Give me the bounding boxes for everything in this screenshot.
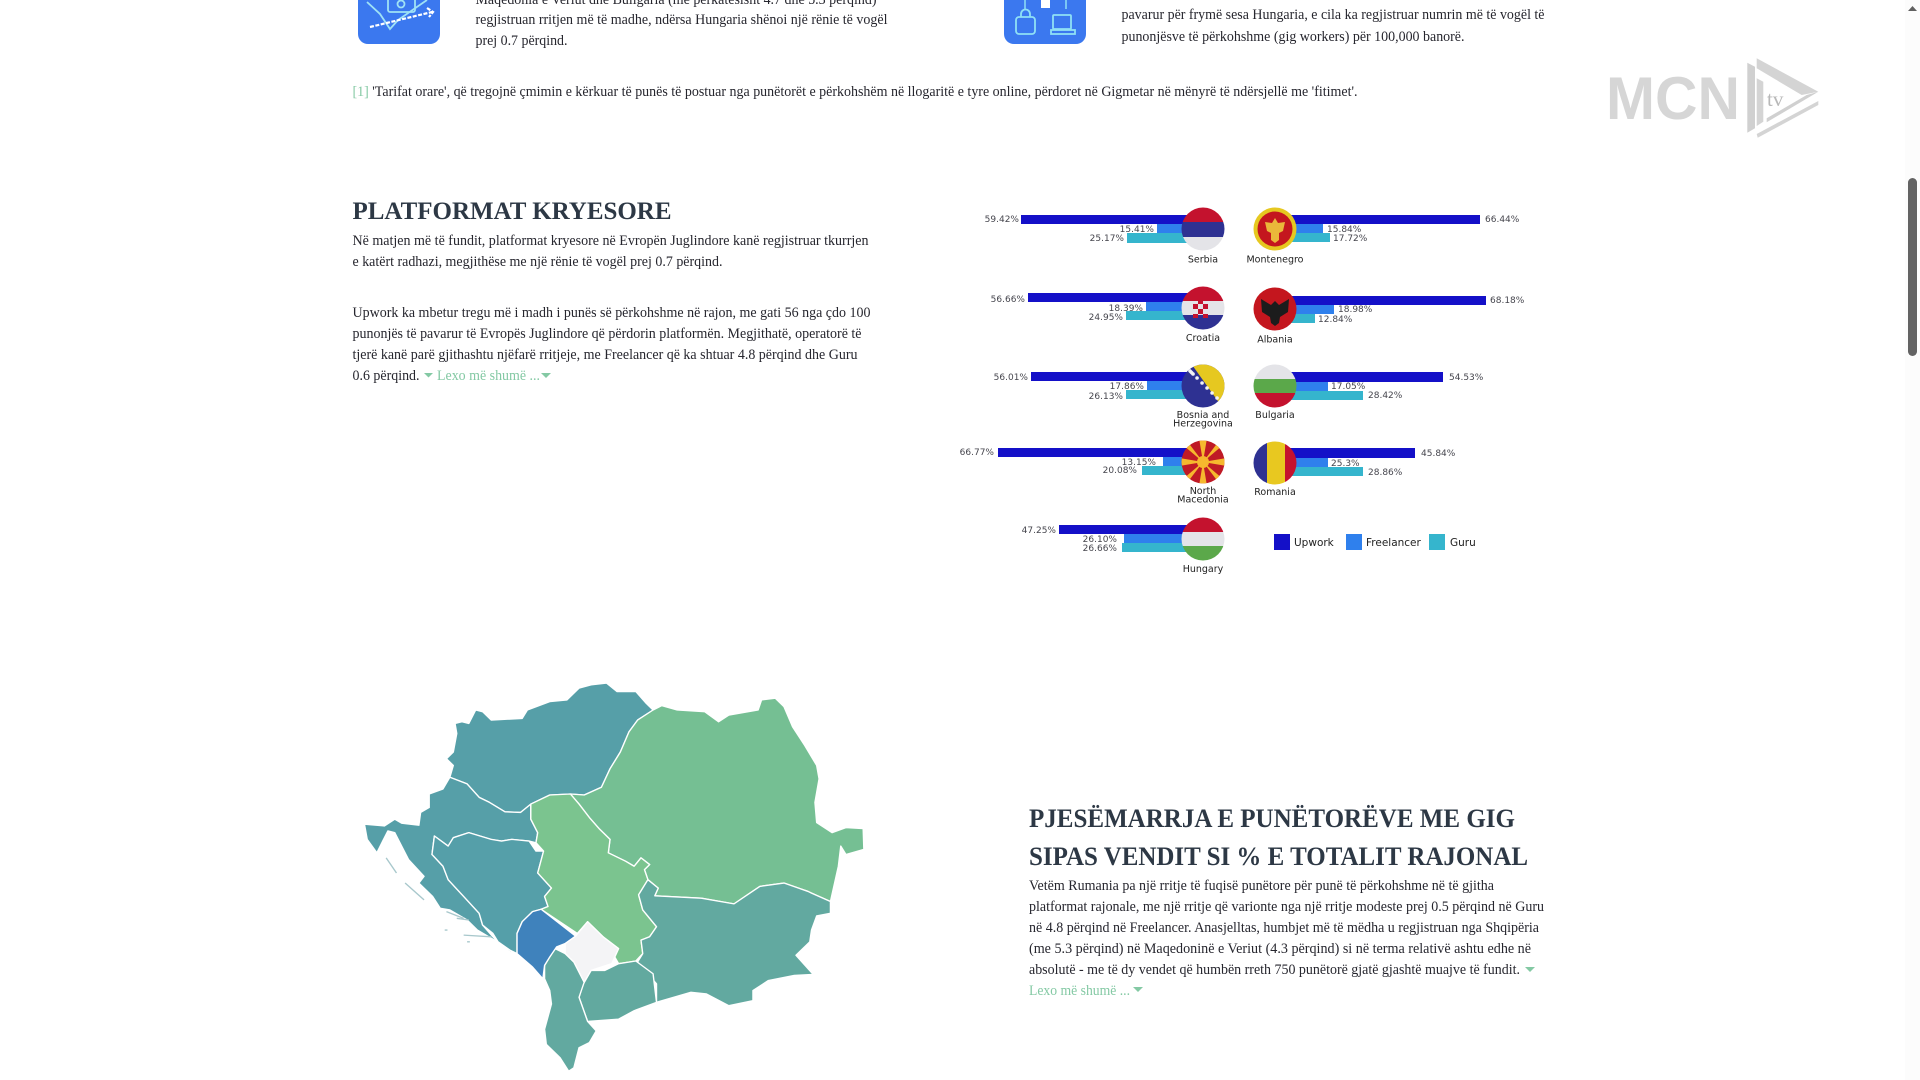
heading: platformat kryesore: PLATFORMAT KRYESORE [352, 198, 672, 225]
row: Hungary [1022, 515, 1230, 575]
text block: participation paragraph: në 4.8 përqind në Freelancer. Anasjelltas, humbjet më të mëdha u regjistruan nga Shqipëria [1029, 920, 1540, 936]
row: Romania: 25.3% [1331, 459, 1360, 469]
row: Croatia [991, 286, 1224, 341]
row: Croatia: 56.66% [991, 295, 1025, 305]
legend: Guru [1450, 537, 1476, 549]
row: Albania: 68.18% [1490, 296, 1525, 306]
row: Croatia: 24.95% [1089, 313, 1123, 323]
heading: participation by country [1029, 804, 1528, 871]
heading: participation by country: PJESËMARRJA E PUNËTORËVE ME GIG [1029, 804, 1515, 833]
text block: upwork paragraph: 0.6 përqind. [352, 368, 420, 384]
row: Romania: 28.86% [1368, 468, 1403, 478]
map region: Kosovo [565, 922, 619, 982]
text block: participation paragraph: absolutë - me të dy vendet që humbën rreth 750 punëtorë gjatë gjashtë muajve të fundit. [1029, 962, 1520, 978]
row: Montenegro: 15.84% [1327, 225, 1362, 235]
text block: participation paragraph: (me 5.3 përqind) në Maqedoninë e Veriut (4.3 përqind) si në terma relativë ashtu edhe në [1029, 941, 1531, 957]
scrollbar [1905, 0, 1920, 1080]
row: Serbia: 59.42% [985, 215, 1019, 225]
text block: upwork paragraph: Upwork ka mbetur tregu më i madh i punës së përkohshme në rajon, me gati 56 nga çdo 100 [352, 305, 870, 321]
legend [1274, 534, 1476, 550]
map region: Albania [545, 949, 596, 1071]
map: gig worker share by country [364, 683, 864, 1071]
icon: map with trend arrow [358, 0, 440, 44]
row: Bosnia and Herzegovina: 17.86% [1110, 382, 1144, 392]
row: Bulgaria: Bulgaria [1255, 410, 1295, 421]
watermark logo: MCN tv: tv [1767, 87, 1784, 111]
row: Hungary: 26.66% [1083, 544, 1117, 554]
text block: upwork paragraph: punonjës të pavarur të Evropës Juglindore që përdorin platformën. Megjithatë, operatorë të [352, 326, 862, 342]
legend: Freelancer [1366, 537, 1422, 549]
row: Bosnia and Herzegovina: 56.01% [994, 373, 1028, 383]
text block: platforms intro [352, 233, 869, 270]
text block: participation paragraph: Lexo më shumë ... [1029, 983, 1130, 999]
row: Montenegro [1246, 208, 1520, 266]
text block: top right summary: pavarur për frymë sesa Hungaria, e cila ka regjistruar numrin më të vogël të [1122, 7, 1544, 23]
text block: upwork paragraph: Lexo më shumë ... [437, 368, 540, 384]
text block: platforms intro: e katërt radhazi, megjithëse me një rënie të vogël prej 0.7 përqind. [352, 254, 722, 270]
row: Serbia: 15.41% [1120, 225, 1154, 235]
icon: bag and laptop [1004, 0, 1086, 44]
row: Montenegro: 17.72% [1333, 234, 1368, 244]
text block: participation paragraph: Vetëm Rumania pa një rritje të fuqisë punëtore për punë të përkohshme në të gjitha [1029, 878, 1495, 894]
footnote: [1] 'Tarifat orare', që tregojnë çmimin e kërkuar të punës të postuar nga punëtorët e përkohshëm në llogaritë e tyre online, përdoret në Gigmetar në mënyrë të ndërsjellë me 'fitimet'. [352, 84, 1358, 100]
map region: Hungary [446, 683, 653, 812]
row: Montenegro: Montenegro [1246, 254, 1304, 266]
row: Romania: 45.84% [1421, 449, 1456, 459]
row: North Macedonia: North [1190, 486, 1216, 497]
row: Hungary: 26.10% [1083, 535, 1117, 545]
watermark logo: MCN tv: MCN [1606, 65, 1740, 132]
text block: top left summary: regjistruan rritjen më të madhe, ndërsa Hungaria shënoi një rënie të vogël [476, 12, 888, 28]
text block: top right summary [1122, 7, 1544, 45]
row: Bulgaria [1250, 362, 1484, 421]
chart: platform shares by country [960, 205, 1525, 575]
row: Albania: Albania [1257, 334, 1293, 346]
map region: Montenegro [517, 909, 576, 979]
row: Albania [1254, 288, 1525, 346]
row: Bulgaria: 17.05% [1331, 382, 1366, 392]
row: North Macedonia [960, 438, 1229, 506]
row: Serbia: 25.17% [1090, 234, 1124, 244]
text block: top left summary [476, 0, 888, 49]
row: Albania: 12.84% [1318, 315, 1353, 325]
text block: participation paragraph: platformat rajonale, me një rritje që varionte nga një rritje modeste prej 0.5 përqind në Guru [1029, 899, 1544, 915]
row: Albania: 18.98% [1338, 305, 1373, 315]
map region: North Macedonia [579, 961, 657, 1021]
row: Bosnia and Herzegovina: Herzegovina [1173, 418, 1233, 430]
legend: Upwork [1294, 537, 1335, 549]
text block: upwork paragraph [352, 305, 870, 384]
row: Hungary: Hungary [1183, 564, 1224, 575]
text block: upwork paragraph: tjerë kanë parë gjithashtu njëfarë rritjeje, me Freelancer që ka shtuar 4.8 përqind dhe Guru [352, 347, 858, 363]
row: Bosnia and Herzegovina: Bosnia and [1177, 410, 1229, 421]
row: Bosnia and Herzegovina [994, 362, 1233, 430]
row: North Macedonia: 13.15% [1122, 458, 1156, 468]
row: Montenegro: 66.44% [1485, 215, 1520, 225]
map region: Croatia [364, 777, 538, 954]
map region: Bulgaria [638, 880, 830, 1006]
row: Bulgaria: 28.42% [1368, 391, 1403, 401]
text block: platforms intro: Në matjen më të fundit, platformat kryesore në Evropën Juglindore kanë regjistruar tkurrjen [352, 233, 869, 249]
row: North Macedonia: 66.77% [960, 448, 994, 458]
row: Bosnia and Herzegovina: 26.13% [1089, 392, 1123, 402]
row: Romania [1250, 440, 1456, 498]
panel: top left summary [358, 0, 888, 49]
row: Hungary: 47.25% [1022, 526, 1056, 536]
row: Croatia: Croatia [1186, 333, 1220, 344]
row: North Macedonia: Macedonia [1177, 494, 1229, 506]
text block: top right summary: punonjësve të përkohshme (gig workers) për 100,000 banorë. [1122, 29, 1464, 45]
map region: Bosnia and Herzegovina [432, 833, 551, 954]
watermark logo: MCN tv [1606, 58, 1818, 138]
heading: participation by country: SIPAS VENDIT SI % E TOTALIT RAJONAL [1029, 842, 1528, 871]
panel: top right summary [1004, 0, 1544, 45]
row: Croatia: 18.39% [1109, 304, 1143, 314]
map region: Romania [570, 698, 864, 904]
text block: participation paragraph [1029, 878, 1544, 999]
row: Serbia: Serbia [1188, 254, 1218, 266]
row: Romania: Romania [1254, 487, 1296, 498]
text block: top left summary: prej 0.7 përqind. [476, 33, 568, 49]
row: North Macedonia: 20.08% [1103, 466, 1137, 476]
map region: Serbia [531, 794, 657, 964]
row: Serbia [985, 208, 1224, 262]
row: Bulgaria: 54.53% [1449, 373, 1484, 383]
